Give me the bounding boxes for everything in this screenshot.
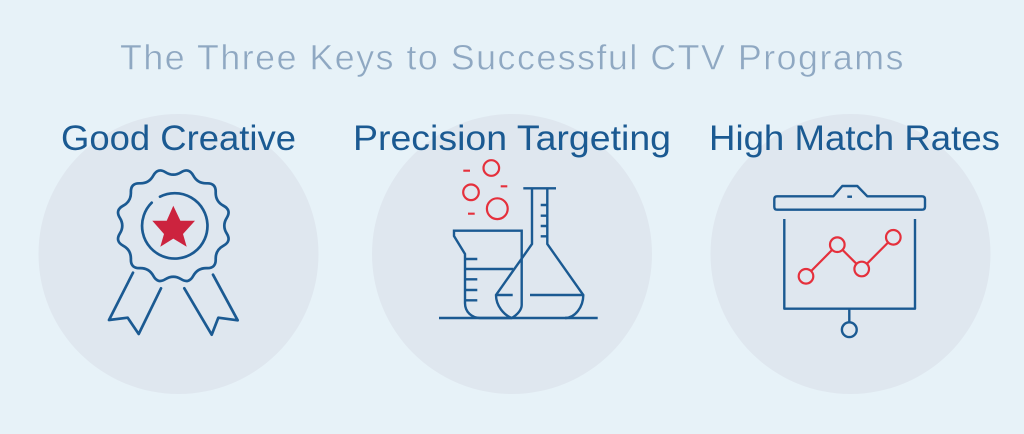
stem bbox=[848, 309, 850, 322]
heading: good creative: Good Creative bbox=[61, 118, 296, 158]
heading: precision targeting: Precision Targeting bbox=[353, 118, 671, 158]
inner ring bbox=[142, 193, 207, 259]
panel: high match rates bbox=[709, 114, 1000, 394]
circle background: good creative bbox=[38, 114, 318, 394]
icon: lab glassware bbox=[439, 188, 598, 318]
icon: red star bbox=[152, 206, 195, 247]
icon: award ribbon bbox=[109, 170, 238, 335]
panel: good creative bbox=[38, 114, 318, 394]
screen bbox=[784, 219, 915, 309]
bench line bbox=[439, 317, 598, 319]
left ribbon tail bbox=[109, 273, 161, 334]
heading: high match rates: High Match Rates bbox=[709, 118, 1000, 158]
circle background: high match rates bbox=[710, 114, 990, 394]
flask ticks and liquid line bbox=[496, 205, 583, 295]
beaker bbox=[454, 231, 522, 318]
pull knob bbox=[842, 322, 857, 337]
icon: red bubbles bbox=[463, 160, 508, 219]
line chart bbox=[799, 230, 901, 284]
title: The Three Keys to Successful CTV Programs bbox=[120, 38, 905, 78]
housing notch bbox=[847, 195, 852, 198]
flask bbox=[496, 188, 583, 318]
circle background: precision targeting bbox=[372, 114, 652, 394]
projector housing bbox=[774, 186, 925, 210]
right ribbon tail bbox=[184, 275, 238, 335]
rosette outline bbox=[118, 170, 229, 281]
icon: presentation screen bbox=[774, 186, 925, 337]
beaker ticks bbox=[465, 259, 513, 300]
panel: precision targeting bbox=[353, 114, 671, 394]
